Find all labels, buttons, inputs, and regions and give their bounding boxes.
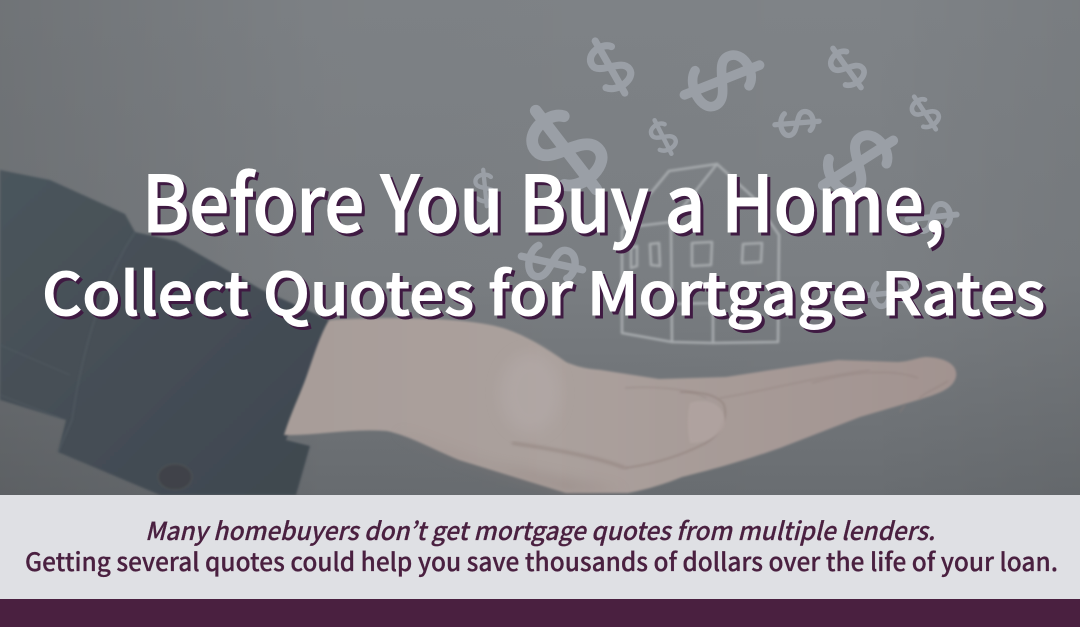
illustration: floating dollar signs xyxy=(473,34,958,309)
title xyxy=(42,143,1045,332)
subtitle text: Many homebuyers don’t get mortgage quotes from multiple lenders. xyxy=(145,512,935,548)
illustration: open hand xyxy=(284,318,956,493)
title: Before You Buy a Home, xyxy=(142,143,945,255)
subtitle text xyxy=(25,512,1058,579)
photo background xyxy=(0,0,1080,495)
title: Collect Quotes for Mortgage Rates xyxy=(42,247,1045,332)
icon: thumbnail xyxy=(688,401,725,443)
subtitle text: Getting several quotes could help you save thousands of dollars over the life of your loan. xyxy=(25,543,1058,579)
footer bar xyxy=(0,599,1080,627)
illustration: shirt sleeve xyxy=(0,170,334,495)
icon: cuff button xyxy=(158,464,192,490)
illustration: sketched house xyxy=(622,164,779,343)
subtitle panel xyxy=(0,495,1080,599)
